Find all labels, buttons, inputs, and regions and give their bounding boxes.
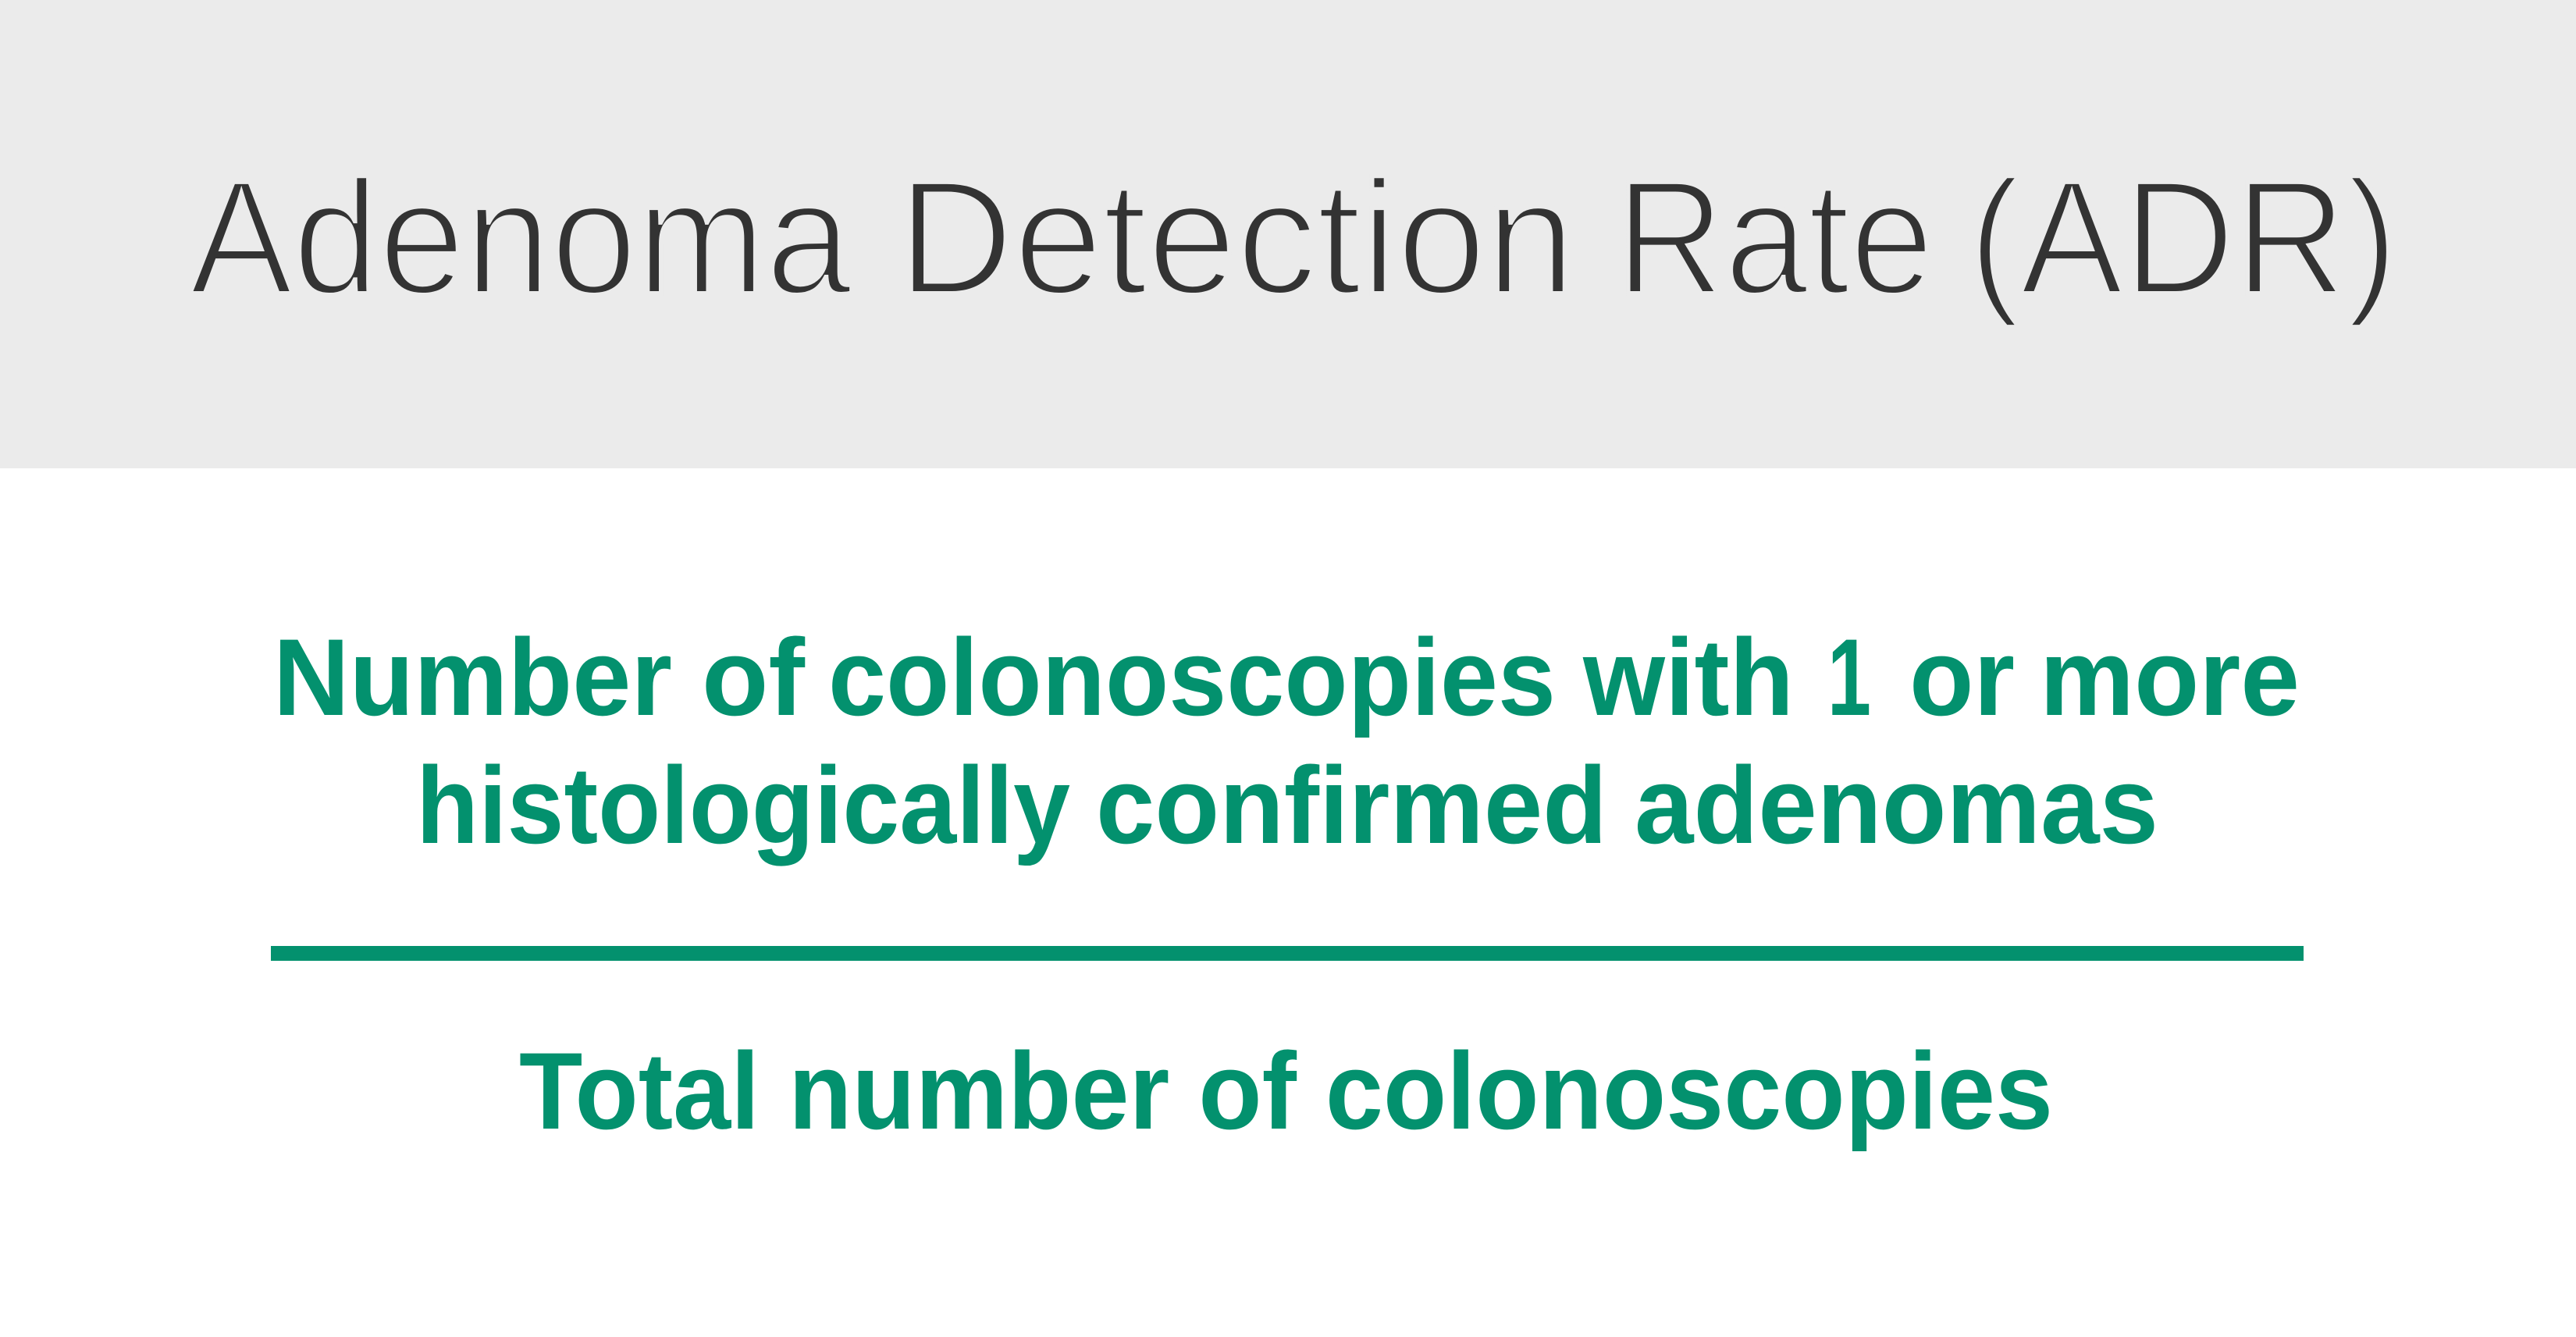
fraction bar — [271, 946, 2304, 961]
numerator text — [273, 616, 2300, 866]
panel: title header — [0, 0, 2576, 468]
title: Detection — [898, 148, 1575, 329]
numerator text: Number — [273, 616, 672, 738]
title: Adenoma — [190, 148, 852, 329]
numerator text: 1 — [1827, 616, 1871, 738]
numerator text: or — [1909, 616, 2015, 738]
title: (ADR) — [1969, 148, 2398, 329]
numerator text: adenomas — [1635, 744, 2158, 866]
numerator text: confirmed — [1096, 744, 1607, 866]
panel: formula — [271, 616, 2304, 1152]
denominator text: Total number of colonoscopies — [519, 1029, 2053, 1152]
numerator text: colonoscopies — [828, 616, 1556, 738]
title — [190, 148, 2398, 329]
numerator text: with — [1582, 616, 1794, 738]
title: Rate — [1616, 148, 1934, 329]
numerator text: more — [2040, 616, 2300, 738]
numerator text: histologically — [416, 744, 1070, 866]
numerator text: of — [702, 616, 805, 738]
